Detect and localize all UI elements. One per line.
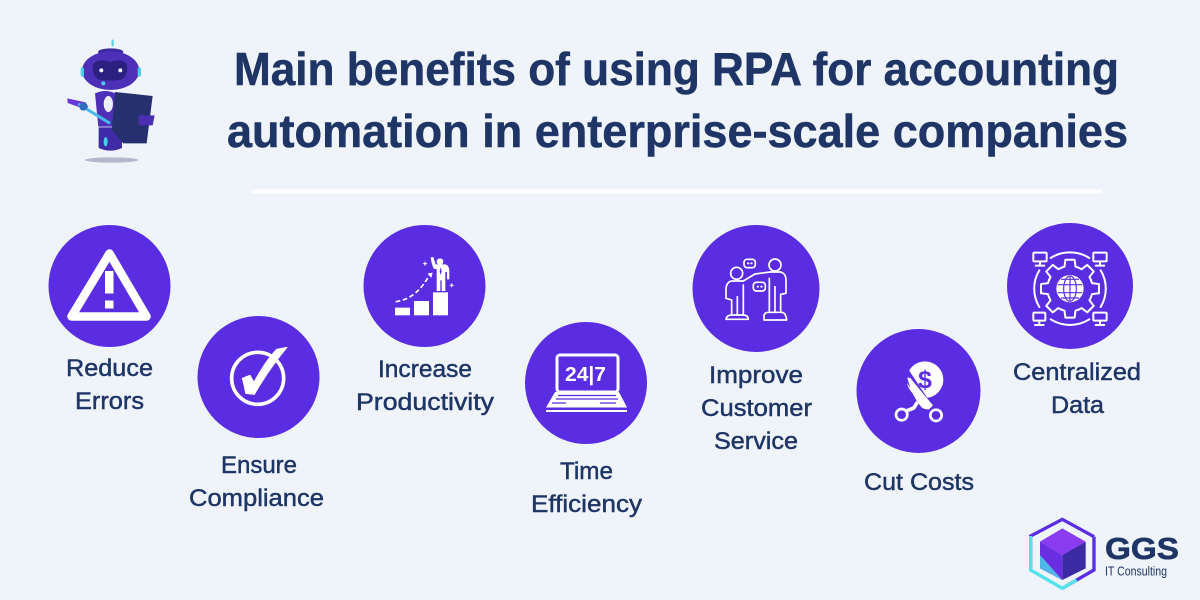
icon: hexagon cube xyxy=(1031,519,1094,588)
label: centralized data: Centralized xyxy=(1013,359,1141,386)
label: reduce errors: Errors xyxy=(75,388,144,415)
label: ensure compliance: Compliance xyxy=(189,485,324,512)
panel: ensure compliance xyxy=(189,316,324,512)
icon: check mark in circle xyxy=(232,347,287,404)
label: ensure compliance: Ensure xyxy=(221,452,297,479)
label: time efficiency xyxy=(531,458,642,518)
panel: improve customer service xyxy=(692,225,820,455)
label: centralized data: Data xyxy=(1051,392,1105,419)
icon: scissors cutting coin: $ xyxy=(918,367,932,394)
icon: two people talking xyxy=(726,259,787,320)
label: increase productivity xyxy=(356,356,494,416)
logo: GGS IT Consulting: GGS xyxy=(1105,531,1179,566)
title xyxy=(227,43,1128,157)
title: Main benefits of using RPA for accounting xyxy=(234,43,1119,95)
label: time efficiency: Time xyxy=(560,458,613,485)
panel: centralized data xyxy=(1007,223,1141,419)
logo: GGS IT Consulting: IT Consulting xyxy=(1105,564,1167,578)
label: improve customer service: Customer xyxy=(701,395,812,422)
label: improve customer service: Improve xyxy=(709,362,803,389)
panel: reduce errors xyxy=(48,225,170,415)
logo: GGS IT Consulting xyxy=(1031,519,1179,588)
title: automation in enterprise-scale companies xyxy=(227,105,1128,157)
label: reduce errors: Reduce xyxy=(66,355,153,382)
icon: warning triangle xyxy=(72,254,146,316)
label: cut costs: Cut Costs xyxy=(864,469,974,496)
label: reduce errors xyxy=(66,355,153,415)
label: time efficiency: Efficiency xyxy=(531,491,642,518)
label: improve customer service xyxy=(701,362,812,455)
panel: time efficiency xyxy=(525,322,647,518)
icon: laptop 24/7: 24|7 xyxy=(565,364,606,386)
panel: increase productivity xyxy=(356,225,494,416)
label: improve customer service: Service xyxy=(714,428,798,455)
label: increase productivity: Productivity xyxy=(356,389,494,416)
icon: gear, globe and network xyxy=(1033,252,1107,325)
icon: person on rising bars xyxy=(395,257,454,315)
label: increase productivity: Increase xyxy=(378,356,472,383)
panel: cut costs xyxy=(856,329,980,496)
icon: robot mascot holding tablet xyxy=(67,41,155,163)
icon: scissors cutting coin xyxy=(896,361,943,421)
icon: laptop 24/7 xyxy=(546,355,627,412)
label: centralized data xyxy=(1013,359,1141,419)
label: ensure compliance xyxy=(189,452,324,512)
